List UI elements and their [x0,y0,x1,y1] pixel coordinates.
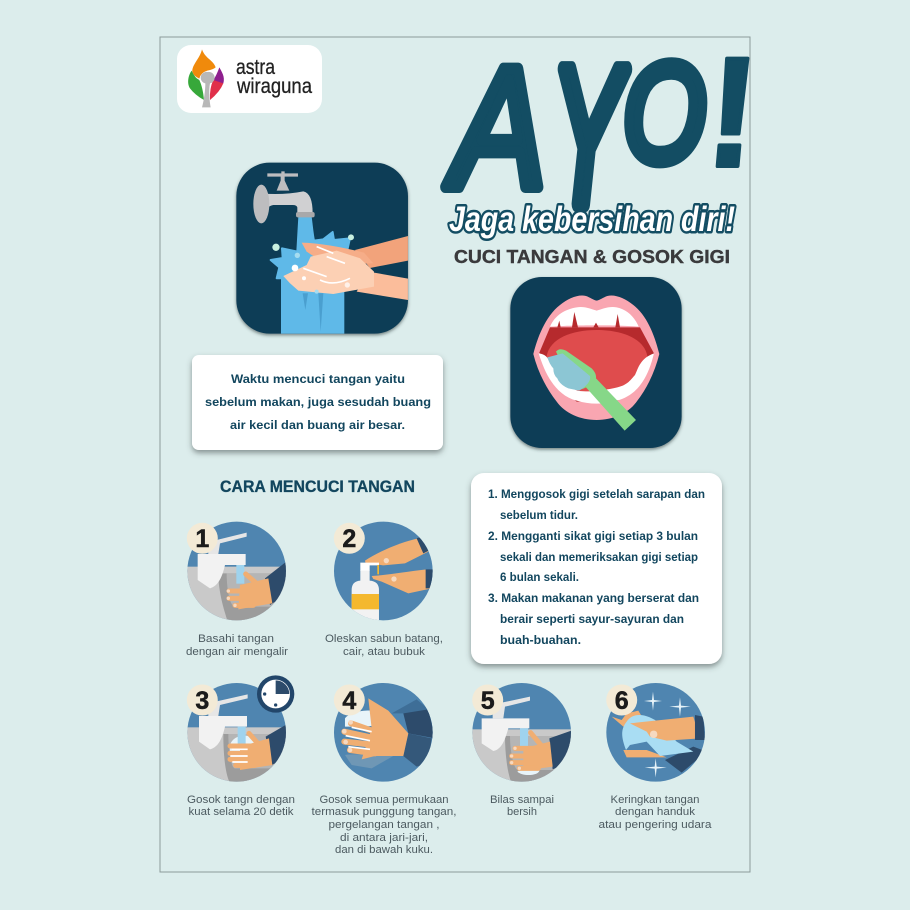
step 6 number badge: 6 [615,687,629,715]
text box: tooth brushing tips: buah-buahan. [500,633,581,647]
heading: Cuci tangan & gosok gigi: CUCI TANGAN & GOSOK GIGI [454,246,730,267]
step 2 caption [325,633,443,658]
step 3 number badge [187,684,218,716]
step 2 caption: Oleskan sabun batang, [325,633,443,645]
lips [533,296,659,420]
logo: astra wiraguna [177,45,322,113]
step 3 illustration [185,683,288,784]
title: AYO!: Y [551,27,628,246]
step 2 number badge: 2 [342,525,356,553]
step 4 illustration [334,683,435,782]
step 5 caption [490,794,554,818]
step 6 caption [598,794,712,831]
text box: tooth brushing tips: 1. Menggosok gigi setelah sarapan dan [488,487,705,501]
text box: tooth brushing tips: berair seperti sayur-sayuran dan [500,612,684,626]
text box: when to wash hands [192,355,443,450]
text box: tooth brushing tips: 2. Mengganti sikat gigi setiap 3 bulan [488,529,698,543]
step 1 caption: Basahi tangan [198,633,274,645]
upper teeth [550,307,639,327]
icon tile: open mouth with toothbrush [510,277,682,448]
step 3 number badge: 3 [195,687,209,715]
arms [355,236,408,268]
text box: when to wash hands: air kecil dan buang air besar. [230,418,405,432]
text box: when to wash hands: sebelum makan, juga sesudah buang [205,395,431,409]
text box: when to wash hands: Waktu mencuci tangan yaitu [231,372,405,386]
step 6 caption: atau pengering udara [598,819,712,831]
text box: tooth brushing tips: sekali dan memeriksakan gigi setiap [500,550,698,564]
step 4 caption: Gosok semua permukaan [320,794,448,806]
poster background panel [160,37,750,872]
step 2 illustration [334,522,433,620]
step 3 caption: Gosok tangn dengan [187,794,295,806]
subtitle: Jaga kebersihan diri!: Jaga kebersihan diri! [449,200,735,239]
step 5 number badge [472,684,503,716]
step 5 caption: bersih [507,806,537,818]
step 4 caption: termasuk punggung tangan, [312,806,456,818]
step 2 caption: cair, atau bubuk [343,646,426,658]
icon: flame logo [188,49,224,107]
step 6 caption: Keringkan tangan [610,794,700,806]
text box: tooth brushing tips [471,473,722,664]
step 3 caption [187,794,295,818]
step 3 caption: kuat selama 20 detik [188,806,294,818]
step 6 caption: dengan handuk [615,806,696,818]
step 4 number badge: 4 [342,687,356,715]
step 2 number badge [334,523,365,554]
step 1 number badge: 1 [195,525,209,553]
step 1 caption: dengan air mengalir [186,646,288,658]
logo wordmark: astra [236,56,275,79]
step 3 clock icon [257,675,294,713]
step 4 caption: di antara jari-jari, [340,832,428,844]
logo: astra wiraguna: wiraguna [236,75,312,98]
text box: tooth brushing tips: 6 bulan sekali. [500,570,579,584]
step 5 caption: Bilas sampai [490,794,554,806]
step 6 number badge [606,684,637,716]
text box: tooth brushing tips: sebelum tidur. [500,508,578,522]
step 4 caption: dan di bawah kuku. [335,844,433,856]
step 6 illustration [606,683,707,782]
step 5 illustration [470,683,573,786]
title: AYO!: A [445,33,546,224]
toothbrush [556,349,636,431]
step 4 caption: pergelangan tangan , [328,819,440,831]
tap [267,171,298,191]
step 1 illustration [185,522,288,623]
lower teeth [539,353,654,404]
mouth cavity [539,327,654,402]
step 4 number badge [334,684,365,716]
title: AYO! [445,25,764,246]
hands [302,243,373,265]
step 5 number badge: 5 [481,687,495,715]
title: AYO!: ! [701,25,764,199]
heading: how to wash hands: CARA MENCUCI TANGAN [220,478,415,496]
sparkles [644,692,691,777]
water stream [271,217,357,334]
step 1 caption [186,633,288,658]
icon tile: washing hands under tap [236,163,408,334]
title: AYO!: O [623,35,706,191]
step 1 number badge [187,523,218,554]
text box: tooth brushing tips: 3. Makan makanan yang berserat dan [488,591,699,605]
step 4 caption [312,794,456,856]
tongue [547,330,647,394]
